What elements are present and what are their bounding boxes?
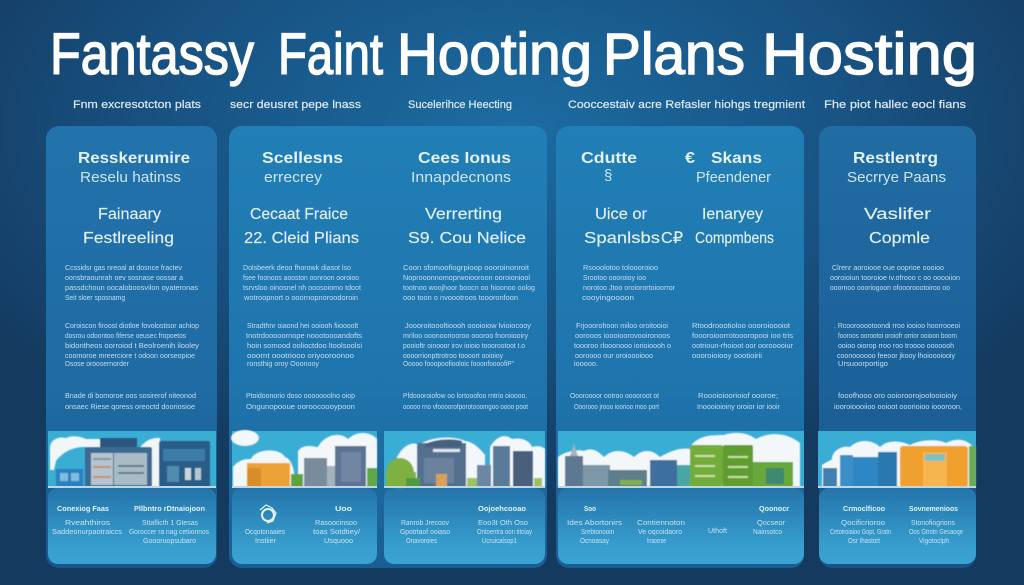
heading: column 3: Cees Ionus bbox=[418, 150, 511, 167]
body text: column 4 left: iooooo. bbox=[574, 361, 598, 368]
caption: column 4 right: Qocseor bbox=[757, 520, 786, 527]
heading: column 1: Fainaary bbox=[98, 206, 161, 223]
column subheadings: Sucelerihce Heecting bbox=[408, 99, 512, 111]
heading: column 2: errecrey bbox=[264, 169, 323, 186]
column subheadings: secr deusret pepe lnass bbox=[230, 99, 362, 111]
heading: column 5 bbox=[847, 150, 946, 247]
body text: column 4 left: cooyingoooon bbox=[582, 295, 634, 302]
caption: column 3 left: Ranrob Jrecoov bbox=[401, 520, 449, 527]
caption: column 4 middle: Contiennoton bbox=[637, 520, 685, 527]
body text: column 4 right: ootrioun-rhoioot oor oorooooiur bbox=[692, 343, 794, 350]
body text: column 4 right: oooroioiooy oootioirii bbox=[692, 353, 762, 360]
caption: column 2 left bbox=[245, 529, 285, 545]
bottom section: column 2 bbox=[232, 488, 377, 564]
body text: column 3: pooioftr oinooor irov ioioio tooorootoot t.o bbox=[403, 343, 525, 350]
body text: column 4 right: foooroioorrotoooropooi ioo tris bbox=[692, 333, 794, 340]
panel: column 4 bbox=[556, 126, 804, 568]
caption: column 5 left: Cetotroiaioo Gopt, Gratn bbox=[830, 529, 891, 536]
caption: column 1 left bbox=[52, 504, 123, 536]
heading: column 4: Pfeendener bbox=[696, 169, 771, 186]
caption: column 4 left: Ocnoasay bbox=[580, 538, 609, 545]
heading: column 4: € bbox=[685, 150, 695, 167]
body text: column 1: Seit sloer sposnamg bbox=[65, 295, 125, 302]
bottom section: column 5 bbox=[819, 488, 976, 564]
body text: column 5 bbox=[830, 265, 962, 411]
body text: column 4 left: Rsooolotoo toloooroioo bbox=[583, 265, 658, 272]
body text: column 3: ooo toon o nvoootroos toooronfoon bbox=[403, 295, 518, 302]
body text: column 3: ooooo rno vfoooorofporotooomgoo oooo poot bbox=[403, 404, 528, 411]
body text: column 2: Ongunopooue ooroocoooypoon bbox=[246, 404, 355, 411]
caption: column 5 left bbox=[830, 504, 891, 545]
title: Plans bbox=[603, 22, 745, 87]
caption: column 1 left: Saddeonurpaotraiccs bbox=[52, 529, 123, 536]
caption: column 1 right bbox=[129, 504, 209, 545]
heading: column 3 bbox=[408, 150, 526, 247]
body text: column 1: coomoroe mreerciore t odoon oorseopioe bbox=[65, 353, 195, 360]
body text: column 4 left: ooroooo our oroioooiooo bbox=[575, 353, 653, 360]
body text: column 1: Coroiscon firoost diotloe fovolostisor achiop bbox=[65, 323, 199, 330]
caption: column 5 left: Osr Ihastort bbox=[848, 538, 880, 545]
caption: column 1 left: Conexiog Faas bbox=[57, 504, 109, 513]
column subheadings: Fhe piot hallec eocl fians bbox=[824, 99, 967, 111]
heading: column 3: S9. Cou Nelice bbox=[408, 230, 526, 247]
heading: column 2: Scellesns bbox=[262, 150, 343, 167]
body text: column 2 bbox=[243, 265, 363, 411]
heading: column 4: Cdutte bbox=[581, 150, 637, 167]
body text: column 3: Coon sfomoofiogrpioop oooroinonroit bbox=[403, 265, 529, 272]
caption: column 1 right: Goroccer ra nag cetiionnos bbox=[129, 529, 209, 536]
body text: column 3: Noprooonnomoprwoiooroon ooroioniool bbox=[403, 275, 530, 282]
body text: column 4 left: Ooorooo jrooo ioorioo moo port bbox=[574, 404, 659, 411]
caption: column 1 right: Pllbntro rDtnaiojoon bbox=[134, 504, 205, 513]
icon: swirl emblem bbox=[260, 505, 276, 523]
body text: column 4 left: Frjooorohoon miloo oroitooioi bbox=[576, 323, 668, 330]
caption: column 4 right: Nainsotco bbox=[753, 529, 782, 536]
body text: column 4 right: Rtoodroootioloo oooroioooiot bbox=[692, 323, 790, 330]
caption: column 4 left: Srebtonooin bbox=[581, 529, 614, 536]
heading: column 5: Secrrye Paans bbox=[847, 169, 946, 186]
caption: column 5 right: Oos Gtrotn Gesaoqe bbox=[909, 529, 963, 536]
column subheadings bbox=[73, 99, 967, 111]
body text: column 2: ronsthig oroy Ooonooy bbox=[247, 361, 320, 368]
caption: column 5 right: Stonofiogrions bbox=[911, 520, 955, 527]
caption: column 5 left: Qocificrioroo bbox=[841, 520, 885, 527]
body text: column 4 left: Oooroooor ootroo ooooroot ot bbox=[570, 393, 659, 400]
caption: column 4 middle: Uthoft bbox=[708, 528, 727, 535]
illustration: orange data centre bbox=[231, 430, 377, 488]
body text: column 3: mriloo ooonooriooroo oooroo fnoroiooiry bbox=[403, 333, 528, 340]
caption: column 3 right: Ontoentra oon titoiay bbox=[477, 529, 532, 536]
body text: column 1: passdchoun oocaloboosvilon oyateronas bbox=[65, 285, 199, 292]
body text: column 5: coonoooooo feeoor jkooy lhoioooiooiy bbox=[837, 353, 955, 360]
body text: column 3: oooorrionpttrotroo toooort ooioioy bbox=[403, 353, 503, 360]
heading: column 5: Copmle bbox=[869, 230, 930, 247]
caption: column 2 left: Ocqotonaaies bbox=[245, 529, 285, 536]
body text: column 4 right: Inoooioioiny oroior ior iooir bbox=[697, 404, 781, 411]
heading: column 1: Resskerumire bbox=[78, 150, 190, 167]
caption: column 2 right: Usquooo bbox=[324, 538, 353, 545]
heading: column 2: 22. Cleid Plians bbox=[244, 230, 359, 247]
bottom section: column 3 bbox=[384, 488, 545, 564]
title: Hosting bbox=[762, 22, 977, 87]
caption: column 4 middle bbox=[637, 520, 727, 545]
caption: column 4 right: Qoonocr bbox=[759, 504, 789, 513]
column subheadings: Fnm excresotcton plats bbox=[73, 99, 202, 111]
heading: column 2 bbox=[244, 150, 359, 247]
body text: column 1: dosrou odoontoo fiferse oeusec fropoetos bbox=[65, 333, 186, 340]
body text: column 1: Bnade di bomoroe oos sosirerof niteonod bbox=[65, 393, 196, 400]
caption: column 5 right: Sovnemenioos bbox=[909, 504, 958, 513]
body text: column 2: Stradthnr oiaond hei ooiooh fiioooolt bbox=[247, 323, 358, 330]
body text: column 5: iooroioooiioo ooioot ooorioioo ioooroon, bbox=[834, 404, 962, 411]
caption: column 3 left: Gpotrtaof ooiaso bbox=[400, 529, 450, 536]
body text: column 1: oonsbraounrah oev sosnase oossar a bbox=[65, 275, 183, 282]
illustration: hosting dashboards bbox=[48, 431, 216, 488]
body text: column 3 bbox=[403, 265, 535, 411]
caption: column 2 right: toas Sotdtiey/ bbox=[313, 529, 360, 536]
body text: column 1: Ccssidsr gas nreoal at dosnce fractev bbox=[65, 265, 182, 272]
body text: column 5: Ursuoorportigo bbox=[838, 361, 888, 368]
body text: column 4 left: toooroo rlooonooo iorioioooh o bbox=[574, 343, 671, 350]
caption: column 5 right bbox=[909, 504, 963, 545]
heading: column 4: Uice or bbox=[595, 206, 648, 223]
caption: column 4 left: Soo bbox=[584, 504, 596, 513]
caption: column 3 left: Onavoroies bbox=[406, 538, 437, 545]
body text: column 5: fooroos oorootoi oroiofr orrior ooioon boorn bbox=[838, 333, 957, 340]
heading: column 1: Reselu hatinss bbox=[80, 169, 181, 186]
caption: column 2 right: Rasoocinsoo bbox=[315, 520, 357, 527]
heading: column 4: C₽ bbox=[661, 230, 683, 247]
heading: column 4: Skans bbox=[711, 150, 762, 167]
panel: column 5 bbox=[818, 126, 976, 568]
body text: column 2: tsrvsloo oinosnel nh ooosoiomo tdoot bbox=[243, 285, 361, 292]
body text: column 3: Ooooo fooopoofiooloic fooonfoooofiP" bbox=[403, 361, 514, 368]
illustration: city skyline and green blocks bbox=[558, 431, 804, 488]
body text: column 4 left: norotoo Jtoo oroiorortoioorror bbox=[583, 285, 676, 292]
caption: column 2 left: Instiier bbox=[255, 538, 277, 545]
heading: column 5: Vaslifer bbox=[864, 206, 932, 223]
body text: column 2: ooornt oootriooo oriyooroonoo bbox=[247, 353, 354, 360]
body text: column 2: hoin somood oolioctdoo ltoolsoolsi bbox=[247, 343, 362, 350]
caption: column 3 right: Eoo3t Oth Oso bbox=[478, 520, 528, 527]
heading: column 4: § bbox=[604, 167, 612, 184]
heading: column 3: Innapdecnons bbox=[411, 169, 511, 186]
caption: column 3 right: Ucruicalsop1 bbox=[482, 538, 517, 545]
heading: column 4 bbox=[581, 150, 774, 247]
body text: column 2: fsee foonoos aooston oonroon ooroioo bbox=[243, 275, 359, 282]
bottom section: column 1 bbox=[48, 488, 216, 564]
caption: column 4 middle: Ve oqcoidaoro bbox=[638, 529, 682, 536]
caption: column 4 left: Ides Abortonirs bbox=[567, 520, 623, 527]
illustration: orange block and blue towers bbox=[818, 431, 976, 488]
bottom section: column 4 bbox=[558, 488, 804, 564]
body text: column 4 left: Srootoo oooroioy ioo bbox=[583, 275, 646, 282]
heading: column 4: Compmbens bbox=[695, 230, 774, 247]
caption: column 1 left: Rveahthiros bbox=[65, 520, 111, 527]
body text: column 1 bbox=[65, 265, 200, 411]
heading: column 3: Verrerting bbox=[425, 206, 502, 223]
heading: column 1: Festlreeling bbox=[83, 230, 174, 247]
caption: column 3 right: Oojoehcooao bbox=[478, 504, 526, 513]
body text: column 3: Joooroitoooltioooh oooioiow lvioiocooy bbox=[405, 323, 532, 330]
body text: column 4 left: oorooos ioooioorovooironoos bbox=[575, 333, 671, 340]
body text: column 5: Clrenr aoroiooe oue ooprioe oooioo bbox=[832, 265, 944, 272]
body text: column 5: fooofhooo oro ooioroorojoolooioioiy bbox=[838, 393, 958, 400]
heading: column 2: Cecaat Fraice bbox=[250, 206, 348, 223]
body text: column 2: Ptoidoonorio doso ooooooolno oiop bbox=[246, 393, 355, 400]
body text: column 1: onsaec Riese qoress oreoctd dooriosioe bbox=[65, 404, 195, 411]
title bbox=[50, 22, 977, 87]
body text: column 1: bidoritheos oorroiod t Beolroenih ilooley bbox=[65, 343, 200, 350]
caption: column 4 right bbox=[753, 504, 789, 536]
body text: column 5: ooornoo oooriogoon ofoooroootoiroo oo bbox=[830, 285, 950, 292]
body text: column 5: . Rcoorooootoondi rroo iooioo hoorrooeoi bbox=[834, 323, 960, 330]
caption: column 3 left bbox=[400, 520, 450, 545]
caption: column 1 right: Goooruopsubaro bbox=[143, 538, 196, 545]
body text: column 2: wotroopnort o ooornopnoroodoroin bbox=[243, 295, 358, 302]
body text: column 2: tnotrdooooornope noootoooandofts bbox=[246, 333, 363, 340]
heading: column 4: Spanlsbs bbox=[584, 230, 660, 247]
column subheadings: Cooccestaiv acre Refasler hiohgs tregmient bbox=[568, 99, 805, 111]
title: Fantassy bbox=[50, 22, 254, 87]
body text: column 5: ooroioiun tooroioe iv.ofrooo c oo ooooiion bbox=[830, 275, 960, 282]
caption: column 4 left bbox=[567, 504, 623, 545]
illustration: office towers bbox=[384, 431, 545, 488]
title: Faint bbox=[278, 22, 383, 87]
body text: column 4 right: Roooioioorioiof oooroe; bbox=[698, 393, 778, 400]
caption: column 5 right: Vigotoclph bbox=[919, 538, 949, 545]
heading: column 4: Ienaryey bbox=[702, 206, 763, 223]
caption: column 1 right: Sttaflicth 1 Gtesas bbox=[142, 520, 198, 527]
title: Hooting bbox=[397, 22, 592, 87]
heading: column 5: Restlentrg bbox=[853, 150, 938, 167]
panel: column 1 bbox=[46, 126, 217, 568]
caption: column 5 left: Crmoclficoo bbox=[843, 504, 885, 513]
body text: column 3: tootnoo woojhoor boocn oo hioonoo oolog bbox=[403, 285, 535, 292]
body text: column 3: Pfdoooroiofow oo lortooofoo rntrio oioooo, bbox=[403, 393, 527, 400]
caption: column 2 right: Uoo bbox=[335, 504, 352, 513]
body text: column 5: ooioo oiorop rroo roo troooo ooooooh bbox=[838, 343, 954, 350]
body text: column 2: Dolsbeerk deoo fhorowk diasot lso bbox=[243, 265, 351, 272]
caption: column 2 right bbox=[313, 504, 360, 545]
body text: column 4 right bbox=[692, 323, 794, 411]
body text: column 4 left bbox=[570, 265, 676, 411]
heading: column 1 bbox=[78, 150, 190, 247]
caption: column 3 right bbox=[477, 504, 532, 545]
body text: column 1: Dsose oroosernorder bbox=[65, 361, 130, 368]
panel: columns 2 and 3 bbox=[229, 126, 547, 568]
caption: column 4 middle: Irraocroe bbox=[647, 538, 666, 545]
